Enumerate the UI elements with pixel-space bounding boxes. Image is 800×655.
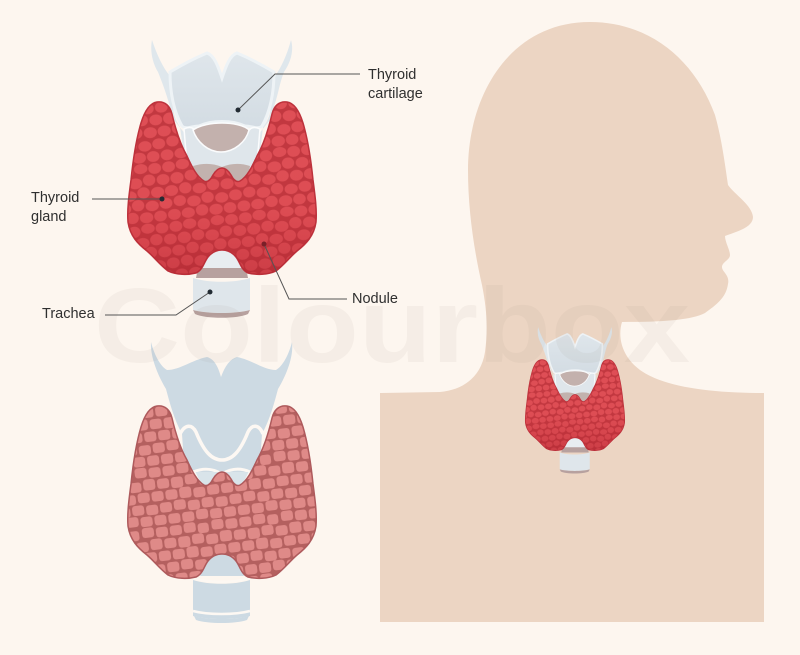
upper thyroid illustration bbox=[128, 40, 316, 318]
label: thyroid cartilage: Thyroid bbox=[368, 67, 416, 83]
label: thyroid gland: Thyroid bbox=[31, 190, 79, 206]
label: trachea: Trachea bbox=[42, 306, 96, 322]
watermark: Colourbox bbox=[94, 267, 690, 385]
leader: nodule bbox=[262, 242, 347, 299]
flat cartilage bbox=[151, 342, 292, 494]
leader: trachea bbox=[105, 290, 212, 315]
label: nodule: Nodule bbox=[352, 291, 398, 307]
leader: thyroid gland bbox=[92, 196, 164, 202]
lower flat thyroid illustration bbox=[128, 342, 316, 623]
flat trachea bbox=[193, 554, 250, 623]
label: thyroid gland: gland bbox=[31, 209, 66, 225]
label: thyroid cartilage: cartilage bbox=[368, 86, 423, 102]
leader: thyroid cartilage bbox=[236, 74, 360, 112]
flat gland bbox=[128, 406, 316, 578]
small thyroid inside silhouette bbox=[525, 327, 625, 473]
head and shoulders silhouette bbox=[380, 22, 764, 622]
